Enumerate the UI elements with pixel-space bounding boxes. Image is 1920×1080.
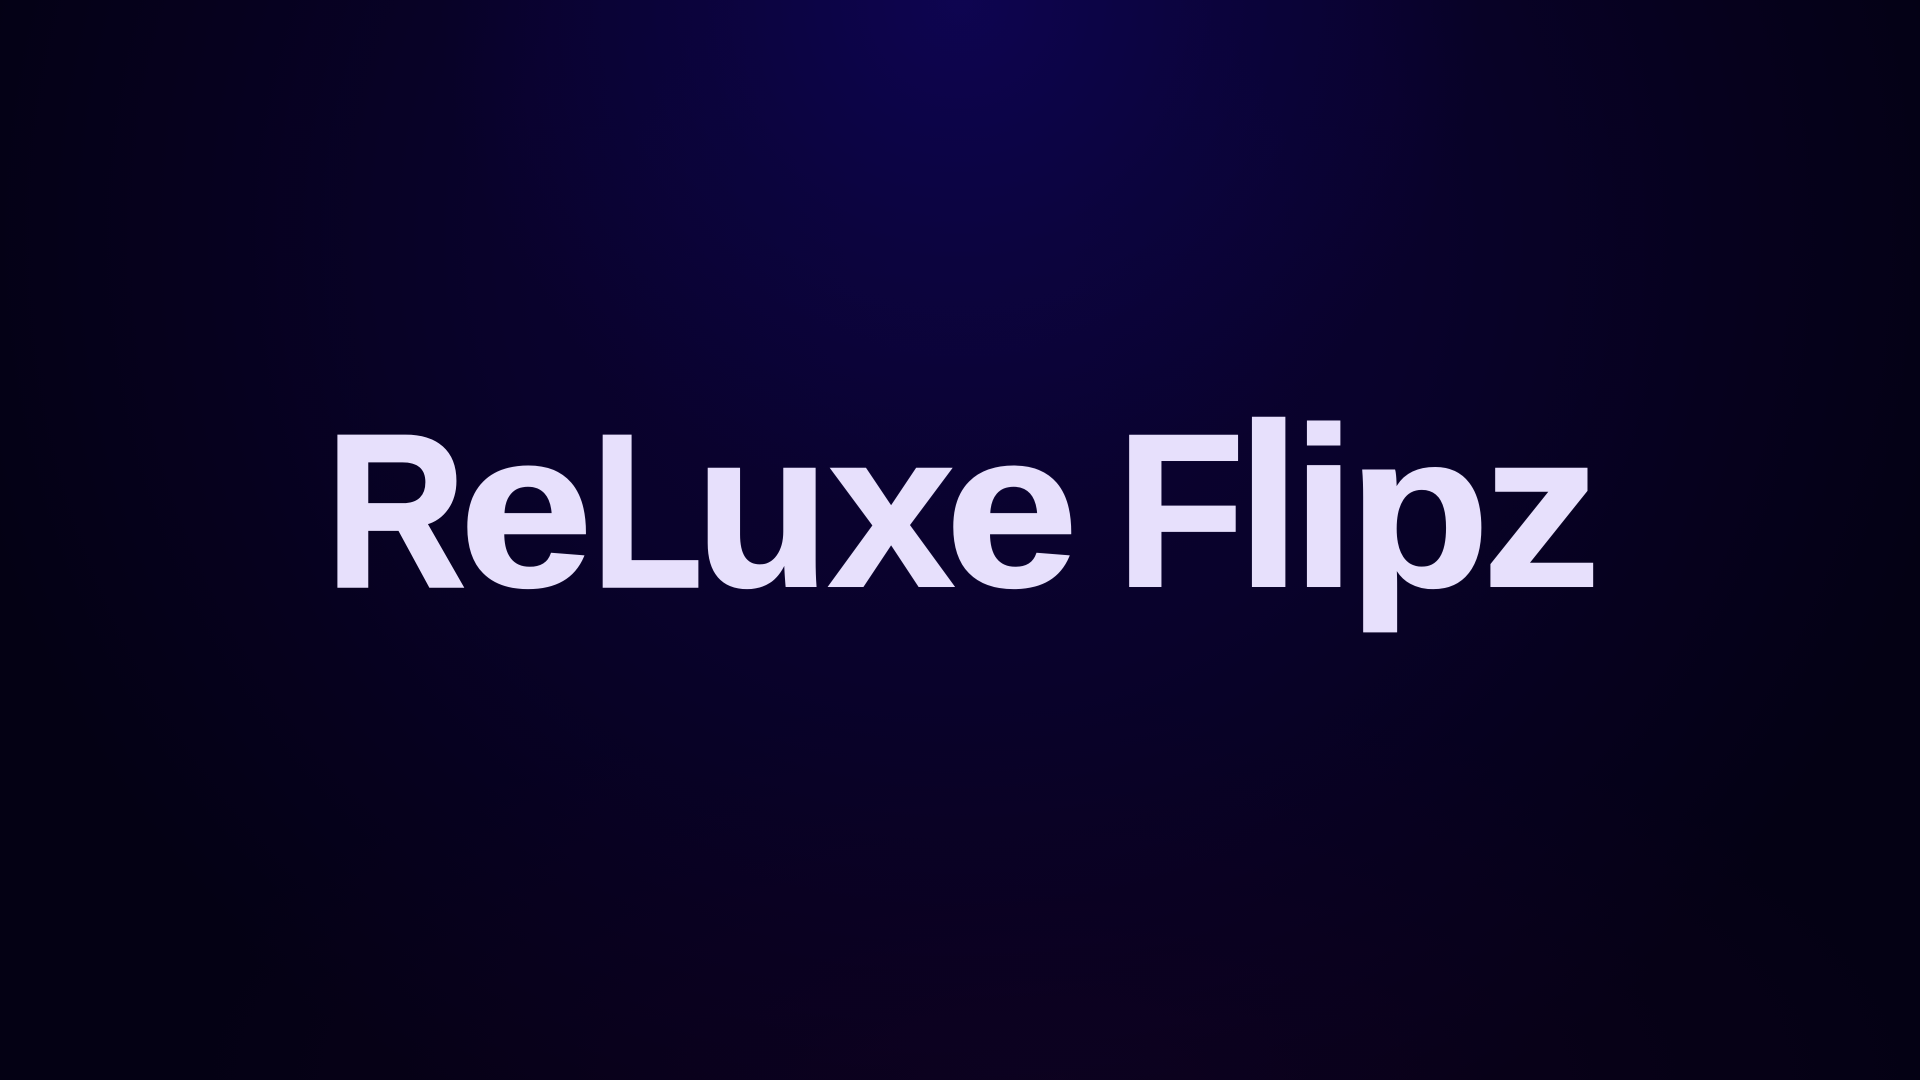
title: ReLuxe Flipz: F [1116, 389, 1245, 633]
title: ReLuxe Flipz: p [1348, 389, 1490, 633]
title: ReLuxe Flipz: z [1482, 386, 1601, 634]
title: ReLuxe Flipz: e [945, 386, 1078, 634]
title: ReLuxe Flipz: L [592, 390, 703, 633]
title: ReLuxe Flipz: l [1237, 376, 1300, 636]
title: ReLuxe Flipz: u [695, 386, 830, 634]
title: ReLuxe Flipz: x [828, 386, 955, 634]
title: ReLuxe Flipz: e [459, 386, 593, 634]
title: ReLuxe Flipz: i [1292, 381, 1355, 635]
title: ReLuxe Flipz: R [326, 390, 465, 633]
